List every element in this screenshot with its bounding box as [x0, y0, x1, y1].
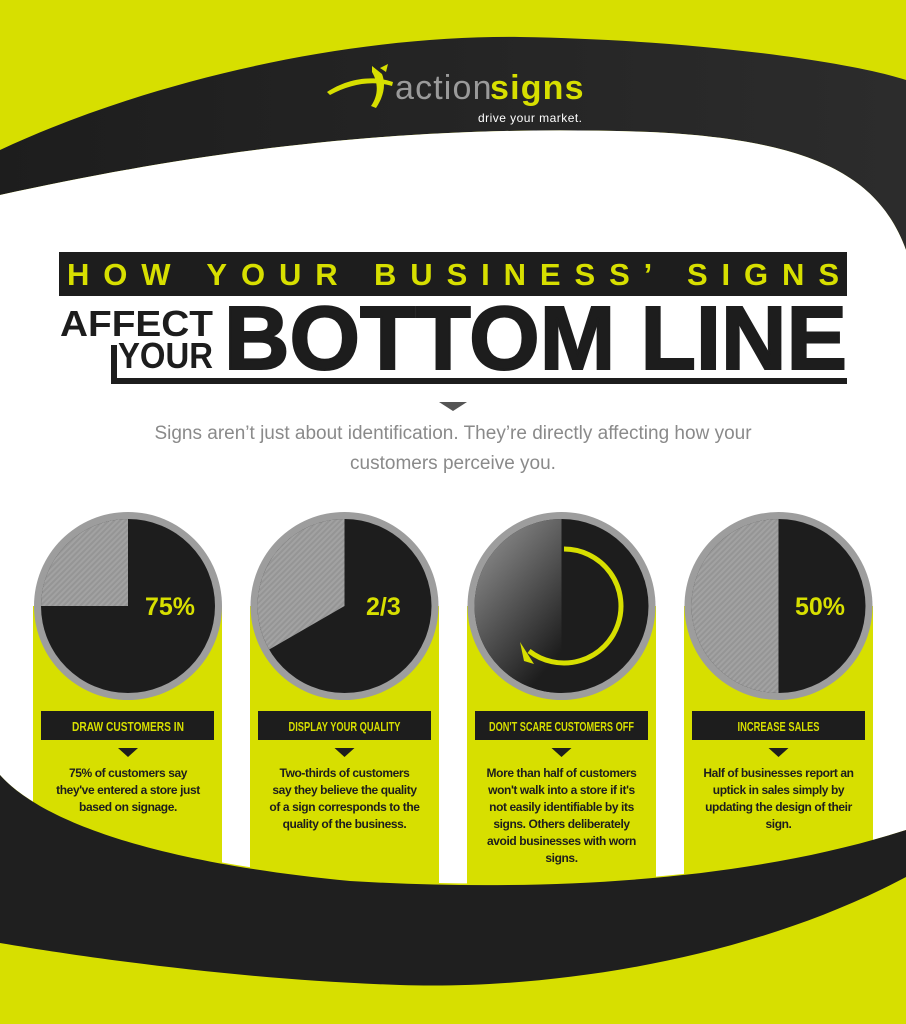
panel: don't scare customers off: won't walk into a store if it's [487, 783, 636, 797]
panel: increase sales: uptick in sales simply by [713, 783, 845, 797]
panel: display your quality: Two-thirds of customers [280, 766, 410, 780]
title: HOW YOUR BUSINESS’ SIGNS [67, 257, 839, 292]
title: AFFECT [60, 303, 213, 344]
white area [0, 130, 906, 883]
panel: draw customers in: they've entered a store just [56, 783, 200, 797]
panel: draw customers in: DRAW CUSTOMERS IN [72, 719, 184, 734]
panel: increase sales: Half of businesses report an [703, 766, 854, 780]
title [59, 252, 847, 389]
logo [327, 64, 583, 125]
bottom band [0, 775, 906, 986]
panel: display your quality: DISPLAY YOUR QUALITY [288, 719, 401, 734]
panel: display your quality: quality of the business. [283, 817, 406, 831]
panel: draw customers in: 75% [145, 593, 195, 621]
title: BOTTOM LINE [224, 289, 847, 389]
subtitle [154, 423, 752, 474]
panel: increase sales: sign. [765, 817, 792, 831]
panel: don't scare customers off: DON'T SCARE CUSTOMERS OFF [489, 719, 634, 734]
panel: increase sales: updating the design of their [705, 800, 853, 814]
panel: display your quality: 2/3 [366, 593, 401, 621]
logo: drive your market. [478, 111, 582, 125]
logo: signs [490, 69, 583, 107]
arrow: title pointer [439, 402, 467, 411]
panel: increase sales: 50% [795, 593, 845, 621]
panel: draw customers in: based on signage. [79, 800, 177, 814]
icon: circular arrow [520, 549, 621, 664]
top band [0, 37, 906, 250]
panel: don't scare customers off: signs. Others deliberately [493, 817, 630, 831]
panel: don't scare customers off: More than half of customers [487, 766, 637, 780]
panel: draw customers in: 75% of customers say [69, 766, 188, 780]
subtitle: customers perceive you. [350, 453, 556, 474]
subtitle: Signs aren’t just about identification. They’re directly affecting how your [154, 423, 752, 444]
panel: display your quality [250, 512, 439, 906]
panel: don't scare customers off: avoid businesses with worn [487, 834, 636, 848]
panel: don't scare customers off: signs. [545, 851, 578, 865]
panel: display your quality: say they believe the quality [272, 783, 417, 797]
panel: increase sales: INCREASE SALES [738, 719, 820, 734]
panel: increase sales [684, 512, 873, 906]
panel: draw customers in [33, 512, 222, 906]
panel: don't scare customers off: not easily identifiable by its [489, 800, 635, 814]
panel: display your quality: of a sign corresponds to the [269, 800, 420, 814]
panel: don't scare customers off [467, 512, 656, 906]
title: YOUR [118, 335, 213, 376]
logo: action [395, 69, 490, 107]
